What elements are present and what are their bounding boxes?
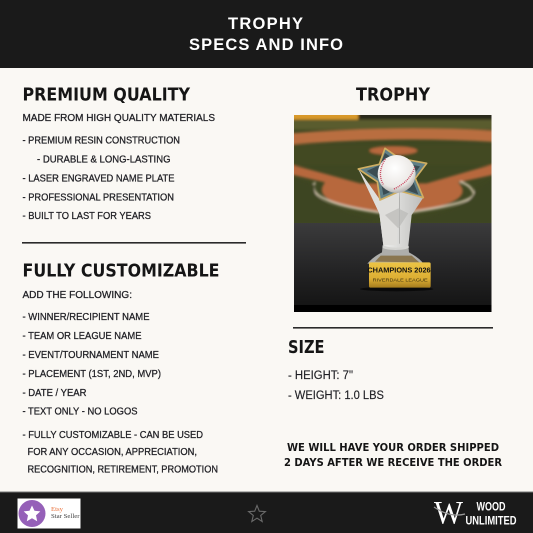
feature list: - DURABLE & LONG-LASTING xyxy=(37,154,170,166)
footer band xyxy=(0,492,533,533)
name plate: CHAMPIONS 2026 xyxy=(367,268,431,275)
heading: size: SIZE xyxy=(288,338,324,358)
heading: fully customizable: FULLY CUSTOMIZABLE xyxy=(22,262,220,282)
icon: purple star rosette xyxy=(18,500,46,527)
panel: fully customizable xyxy=(22,262,220,476)
trophy xyxy=(358,148,433,291)
shipping note xyxy=(284,441,503,469)
product photo: baseball trophy xyxy=(294,115,492,312)
blurred baseball field xyxy=(294,115,492,223)
badge: Etsy star seller: Etsy xyxy=(51,507,63,513)
title: TROPHY xyxy=(228,15,303,33)
feature list xyxy=(22,134,180,222)
customization list: - DATE / YEAR xyxy=(22,387,87,399)
customization note: FOR ANY OCCASION, APPRECIATION, xyxy=(28,446,197,458)
feature list: - PROFESSIONAL PRESENTATION xyxy=(22,192,174,204)
trophy column xyxy=(358,169,423,248)
customization list: - EVENT/TOURNAMENT NAME xyxy=(22,349,159,361)
logo: wood unlimited: WOOD xyxy=(476,500,506,514)
weight: - WEIGHT: 1.0 LBS xyxy=(288,390,384,402)
icon: outlined star xyxy=(249,506,265,522)
shipping note: WE WILL HAVE YOUR ORDER SHIPPED xyxy=(287,441,499,454)
logo: wood unlimited: UNLIMITED xyxy=(466,514,517,528)
feature list: - PREMIUM RESIN CONSTRUCTION xyxy=(22,134,180,146)
customization list xyxy=(22,311,161,418)
badge: Etsy star seller xyxy=(18,498,80,528)
header band xyxy=(0,0,533,68)
customization list: - TEXT ONLY - NO LOGOS xyxy=(22,406,138,418)
trophy base xyxy=(367,244,423,264)
dark table xyxy=(294,223,492,312)
logo: wood unlimited xyxy=(434,496,517,532)
badge: Etsy star seller: Star Seller xyxy=(51,514,80,520)
heading: premium quality: PREMIUM QUALITY xyxy=(22,86,190,106)
feature list: - BUILT TO LAST FOR YEARS xyxy=(22,210,151,222)
name plate: RIVERDALE LEAGUE xyxy=(373,277,428,283)
customization list: - PLACEMENT (1ST, 2ND, MVP) xyxy=(22,368,161,380)
title: SPECS AND INFO xyxy=(189,36,343,54)
feature list: - LASER ENGRAVED NAME PLATE xyxy=(22,172,174,184)
panel: premium quality xyxy=(22,86,215,222)
customization list: - WINNER/RECIPIENT NAME xyxy=(22,311,150,323)
baseball xyxy=(378,155,416,193)
subheading: add the following: ADD THE FOLLOWING: xyxy=(22,289,132,301)
panel: size xyxy=(288,338,384,402)
customization list: - TEAM OR LEAGUE NAME xyxy=(22,330,142,342)
customization note: - FULLY CUSTOMIZABLE - CAN BE USED xyxy=(22,429,203,441)
customization note: RECOGNITION, RETIREMENT, PROMOTION xyxy=(28,464,218,476)
logo mark: W: W xyxy=(434,496,464,532)
shipping note: 2 DAYS AFTER WE RECEIVE THE ORDER xyxy=(284,456,503,469)
subheading: materials: MADE FROM HIGH QUALITY MATERIALS xyxy=(22,112,215,124)
name plate xyxy=(367,262,431,288)
heading: trophy: TROPHY xyxy=(356,86,430,106)
customization note xyxy=(22,429,218,476)
title xyxy=(189,15,343,54)
star xyxy=(358,148,427,200)
height: - HEIGHT: 7" xyxy=(288,370,353,382)
plate shadow xyxy=(360,288,433,292)
